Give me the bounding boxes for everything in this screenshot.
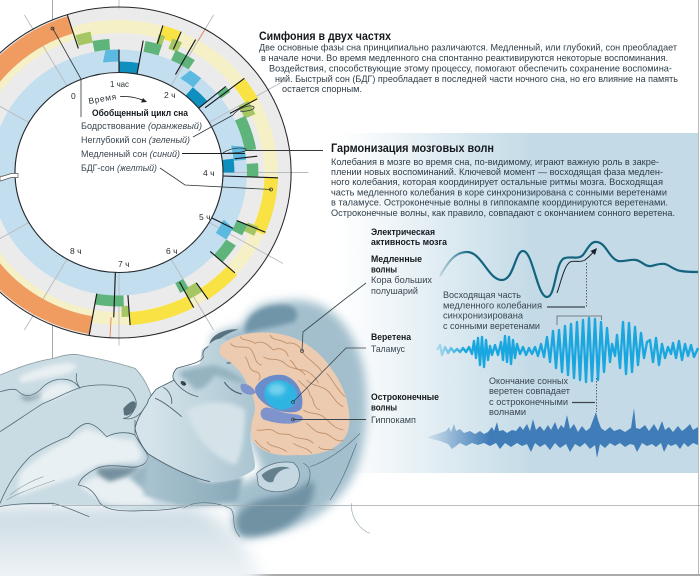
ring hour labels: 7 ч	[118, 259, 130, 269]
annotation: rising slow oscillation: синхронизирована	[443, 310, 524, 322]
text block: brain waves: ного колебания, которая координирует остальные ритмы мозга. Восходящая	[331, 177, 663, 188]
label: slow waves: Кора больших	[371, 275, 432, 286]
time arrow: Время	[88, 91, 117, 106]
ring hour labels: 4 ч	[203, 168, 215, 178]
label: sharp waves: Гиппокамп	[371, 415, 416, 426]
hand shadows	[20, 392, 140, 482]
text block: brain waves: в таламусе. Остроконечные волны в гиппокампе координируются веретенами.	[331, 198, 668, 208]
annotation: end of spindles: веретен совпадает	[489, 386, 571, 397]
brain folds	[230, 335, 345, 453]
arm highlights	[17, 363, 157, 506]
chart: spindle wave	[437, 318, 698, 382]
arm base	[0, 354, 183, 510]
text block: symphony: ний. Быстрый сон (БДГ) преобладает в последней части ночного сна, но его влияние на память	[275, 74, 678, 85]
panel: blue gradient background	[340, 133, 698, 473]
ring legend: Медленный сон (синий)	[81, 149, 180, 160]
text block: symphony: в начале ночи. Во время медленного сна спонтанно реактивируются некоторые воспоминания.	[261, 53, 668, 64]
hair mass	[183, 300, 367, 538]
label: slow waves	[371, 254, 432, 297]
annotation: end of spindles: с остроконечными	[489, 397, 568, 408]
thalamus highlight	[268, 383, 285, 395]
facial features	[135, 347, 251, 482]
ring legend: БДГ-сон (желтый)	[81, 163, 157, 174]
ring hour labels: 1 час	[110, 79, 130, 89]
label: spindles: Веретена	[371, 332, 412, 343]
annotation: end of spindles	[489, 376, 571, 418]
annotation: rising slow oscillation: медленного колебания	[443, 300, 542, 312]
ring hour labels	[70, 79, 215, 269]
label: slow waves: полушарий	[371, 286, 418, 297]
label: slow waves: волны	[371, 264, 397, 276]
ring legend	[81, 108, 202, 174]
brain	[220, 332, 349, 455]
pale yellow track	[0, 26, 271, 318]
text block: symphony	[259, 42, 678, 95]
rising arrow on slow wave	[557, 248, 597, 293]
pillow	[0, 506, 270, 576]
hippocampus	[240, 384, 303, 424]
legend leader lines	[51, 27, 272, 191]
face shading	[180, 365, 247, 465]
ring outlines	[0, 7, 291, 338]
label: sharp waves	[371, 392, 439, 426]
ring legend: Бодрствование (оранжевый)	[81, 121, 202, 132]
face	[135, 339, 256, 482]
head	[135, 300, 370, 538]
ring legend: Обобщенный цикл сна	[92, 108, 189, 119]
text block: brain waves: Колебания в мозге во время сна, по-видимому, играют важную роль в закре-	[331, 157, 659, 168]
deep sleep segments (dark blue)	[0, 24, 274, 321]
text block: symphony: остается спорным.	[282, 84, 362, 95]
hair lower mass	[236, 480, 314, 536]
annotation: rising slow oscillation: Восходящая часть	[443, 290, 521, 301]
chart: slow wave	[440, 242, 698, 297]
hour ticks	[0, 0, 308, 346]
neck shadow near arm	[130, 437, 200, 503]
thalamus	[255, 375, 302, 412]
hand contours	[0, 354, 183, 517]
annotation: rising slow oscillation	[443, 290, 542, 332]
arms and hands	[0, 354, 200, 517]
hair front strand	[209, 329, 238, 347]
label: sharp waves: Остроконечные	[371, 392, 439, 403]
knuckle shadow	[123, 401, 136, 416]
sleep cycle ring chart	[0, 0, 334, 379]
chart: sharp wave ripples	[428, 408, 698, 458]
dark hair crown	[245, 305, 297, 333]
light sleep segments (light green)	[0, 0, 318, 364]
text block: symphony: Две основные фазы сна принципиально различаются. Медленный, или глубокий, сон преобладает	[259, 42, 678, 54]
label: spindles	[371, 332, 412, 355]
light blue track	[3, 61, 235, 284]
text block: brain waves: часть медленного колебания в коре синхронизирована с сонными веретенами	[331, 188, 667, 198]
illustration: sleeping woman	[0, 300, 370, 576]
REM segments (yellow)	[0, 0, 334, 379]
ring hour labels: 0	[71, 91, 76, 101]
ring hour labels: 6 ч	[166, 246, 178, 256]
non-REM light segments (green)	[0, 0, 307, 354]
annotation lines: slow oscillation and bracket	[547, 263, 602, 325]
annotation: rising slow oscillation: с сонными веретенами	[443, 321, 540, 332]
connector to section two	[246, 150, 323, 152]
orange accent ticks	[110, 30, 205, 337]
text block: symphony: Воздействия, способствующие этому процессу, помогают обеспечить сохранение воспомина-	[269, 64, 672, 74]
slow-wave segments (blue)	[0, 11, 287, 334]
ring hour labels: 8 ч	[70, 246, 82, 256]
ear	[257, 462, 299, 492]
left notch on the ring	[0, 174, 18, 181]
neck	[143, 454, 243, 507]
ring base	[0, 40, 257, 306]
text block: brain waves	[331, 157, 675, 219]
horizontal rule	[52, 504, 700, 506]
nostril	[180, 380, 187, 387]
thalamus core	[260, 376, 301, 414]
stage transition lines	[67, 15, 278, 335]
wake segments (orange)	[0, 0, 330, 375]
text block: brain waves: плении новых воспоминаний. Ключевой момент — восходящая фаза медлен-	[331, 167, 663, 178]
annotation: end of spindles: Окончание сонных	[489, 376, 568, 387]
heading: harmonizing brain waves: Гармонизация мозговых волн	[331, 143, 494, 155]
chart label: electrical activity	[371, 227, 448, 248]
chart label: electrical activity: Электрическая	[371, 227, 435, 238]
chart label: electrical activity: активность мозга	[371, 237, 448, 248]
annotation lines: end of spindles	[572, 378, 596, 412]
label: sharp waves: волны	[371, 402, 397, 414]
heading: symphony in two parts: Симфония в двух частях	[259, 31, 392, 43]
time arrow	[88, 91, 147, 106]
label: spindles: Таламус	[371, 344, 405, 355]
annotation: end of spindles: волнами	[489, 407, 526, 418]
inner ear	[262, 467, 290, 482]
text block: brain waves: Остроконечные волны, как правило, совпадают с окончанием сонного веретена.	[331, 208, 675, 219]
ring hour labels: 2 ч	[164, 90, 176, 100]
label: slow waves: Медленные	[371, 254, 422, 265]
ring hour labels: 5 ч	[199, 212, 211, 222]
anatomy leader lines	[292, 283, 366, 421]
hair strands	[183, 433, 370, 537]
ring legend: Неглубокий сон (зеленый)	[81, 135, 190, 146]
